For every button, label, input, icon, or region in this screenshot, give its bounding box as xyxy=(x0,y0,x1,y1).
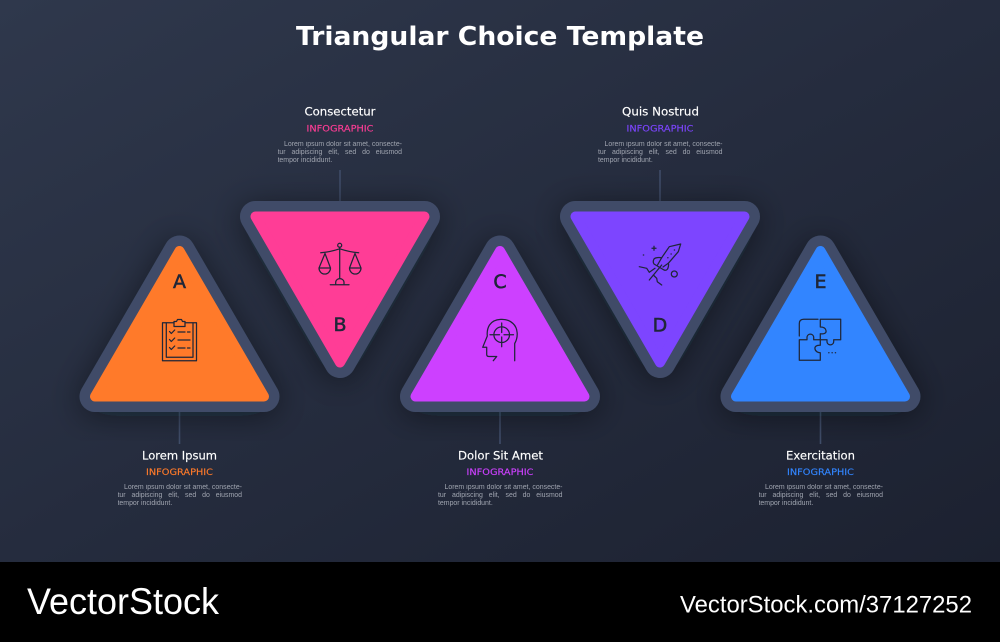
text block: Consectetur: tur adipiscing elit, sed do eiusmod xyxy=(278,149,402,156)
letter C: C xyxy=(493,271,507,293)
text block: Exercitation: INFOGRAPHIC xyxy=(787,468,854,478)
text block: Exercitation: Exercitation xyxy=(786,450,855,462)
text block: Quis Nostrud: tur adipiscing elit, sed do eiusmod xyxy=(598,149,722,156)
text block: Exercitation: tur adipiscing elit, sed do eiusmod xyxy=(758,492,883,499)
text block: Consectetur: Lorem ipsum dolor sit amet, consecte- xyxy=(284,140,402,148)
title: Triangular Choice Template xyxy=(296,22,704,52)
icon: puzzle xyxy=(799,319,841,360)
text block: Lorem Ipsum: tempor incididunt. xyxy=(118,500,172,507)
text block: Dolor Sit Amet: Dolor Sit Amet xyxy=(458,450,544,462)
letter E: E xyxy=(814,271,827,293)
text block: Quis Nostrud: tempor incididunt. xyxy=(598,157,653,164)
footer url text: VectorStock.com/37127252 xyxy=(680,592,972,619)
text block: Exercitation: Lorem ipsum dolor sit amet, consecte- xyxy=(765,484,883,490)
text block: Quis Nostrud: Lorem ipsum dolor sit amet, consecte- xyxy=(604,140,722,148)
letter A: A xyxy=(173,271,186,293)
text block: Dolor Sit Amet xyxy=(438,450,563,510)
footer band xyxy=(0,562,1000,642)
connector: A xyxy=(178,410,180,444)
triangle D xyxy=(576,216,744,362)
text block: Consectetur: Consectetur xyxy=(304,106,376,119)
text block: Consectetur xyxy=(278,106,402,166)
text block: Dolor Sit Amet: tempor incididunt. xyxy=(438,500,493,507)
icon: rocket xyxy=(639,244,681,285)
connector: B xyxy=(339,170,341,203)
text block: Lorem Ipsum: tur adipiscing elit, sed do eiusmod xyxy=(118,492,242,499)
text block: Exercitation xyxy=(758,450,884,510)
text block: Dolor Sit Amet: Lorem ipsum dolor sit amet, consecte- xyxy=(444,484,562,490)
connector: C xyxy=(499,410,501,444)
triangle A xyxy=(95,251,264,396)
text block: Quis Nostrud xyxy=(598,106,723,166)
text block: Lorem Ipsum: INFOGRAPHIC xyxy=(146,468,213,478)
footer logo text: VectorStock xyxy=(27,581,219,622)
text block: Exercitation: tempor incididunt. xyxy=(758,500,813,507)
icon: head with target xyxy=(483,319,517,361)
text block: Dolor Sit Amet: tur adipiscing elit, sed do eiusmod xyxy=(438,492,562,499)
text block: Consectetur: INFOGRAPHIC xyxy=(306,125,374,135)
icon: clipboard xyxy=(162,320,196,361)
text block: Quis Nostrud: Quis Nostrud xyxy=(622,106,699,119)
triangle C xyxy=(416,251,584,396)
text block: Lorem Ipsum xyxy=(118,450,242,510)
connector: E xyxy=(820,410,822,444)
text block: Dolor Sit Amet: INFOGRAPHIC xyxy=(466,468,534,478)
text block: Quis Nostrud: INFOGRAPHIC xyxy=(626,125,694,135)
triangle B xyxy=(256,216,424,362)
connector: D xyxy=(659,170,661,203)
icon: scales xyxy=(319,243,361,285)
text block: Lorem Ipsum: Lorem Ipsum xyxy=(142,450,217,462)
triangle E xyxy=(736,251,905,396)
text block: Consectetur: tempor incididunt. xyxy=(278,157,332,164)
text block: Lorem Ipsum: Lorem ipsum dolor sit amet, consecte- xyxy=(124,484,242,490)
letter D: D xyxy=(653,314,667,336)
letter B: B xyxy=(333,314,347,336)
